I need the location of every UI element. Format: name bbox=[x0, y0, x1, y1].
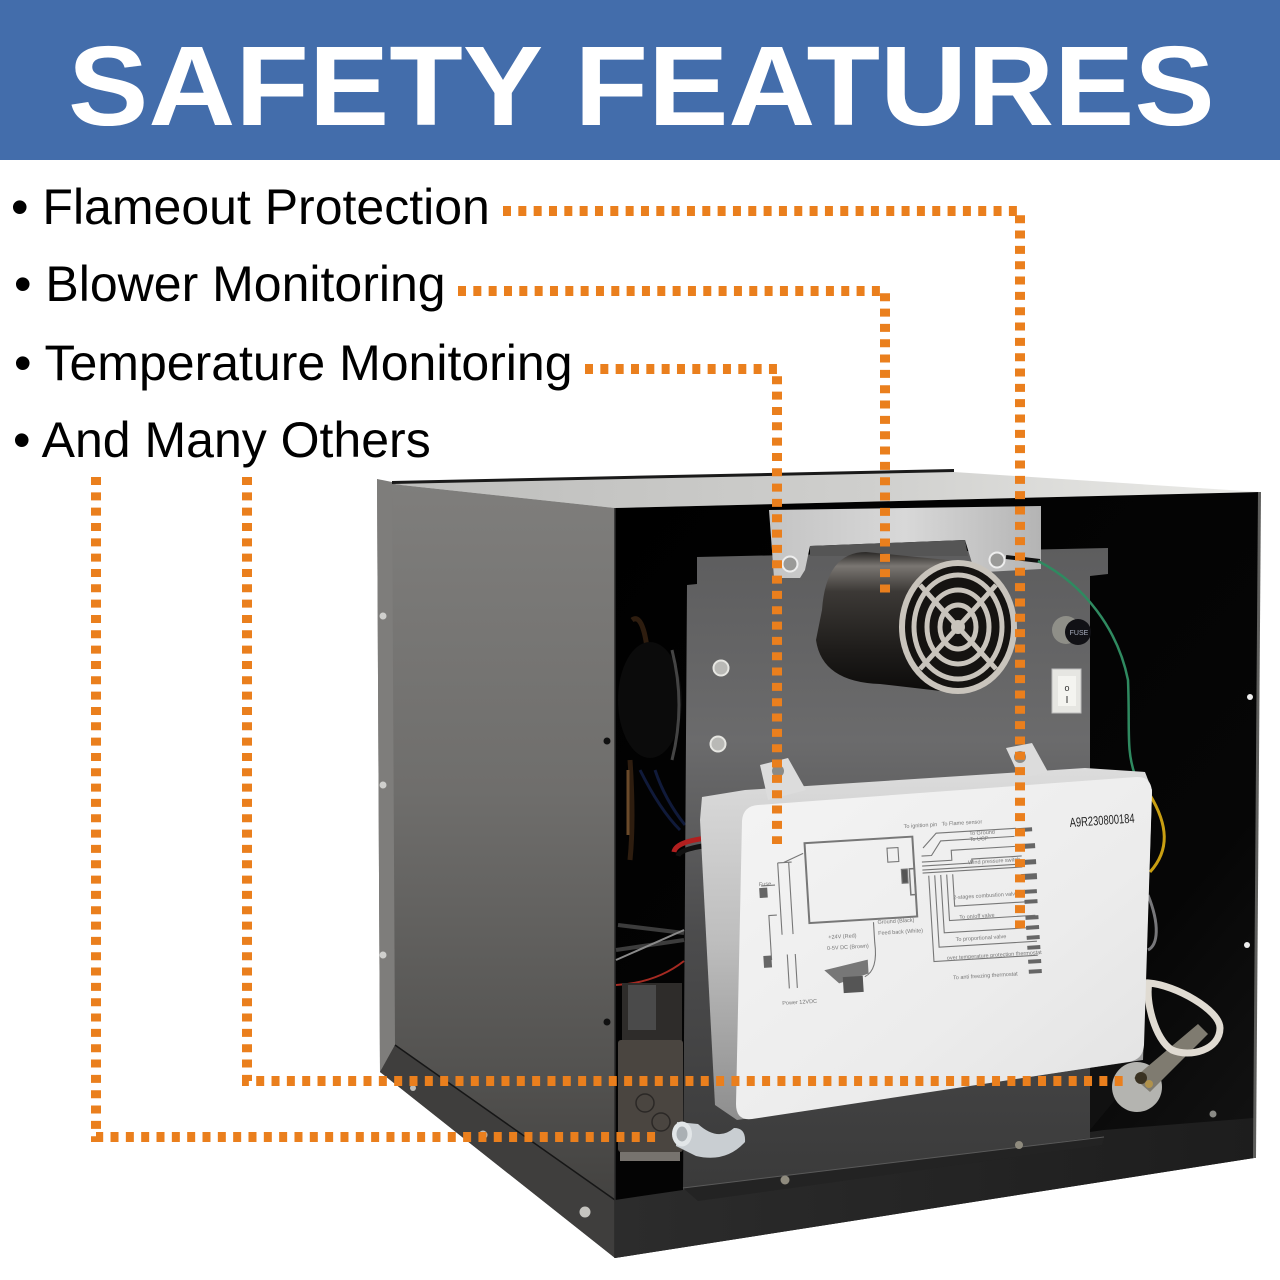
wiring diagram: Wind pressure switch bbox=[968, 857, 1020, 866]
left side panel bbox=[377, 479, 615, 1258]
leader: flameout protection bbox=[503, 211, 1020, 929]
wiring diagram: Ground (Black) bbox=[877, 918, 915, 926]
icon: blower fan bbox=[816, 552, 1017, 694]
wiring diagram: To UCP bbox=[969, 836, 989, 843]
mounting plate bbox=[683, 548, 1150, 1190]
icon: rocker switch bbox=[1052, 669, 1081, 713]
wiring diagram: To anti freezing thermostat bbox=[953, 971, 1018, 981]
unit top lid bbox=[392, 469, 1260, 508]
control box side bbox=[700, 768, 1152, 1120]
title banner: SAFETY FEATURES bbox=[68, 23, 1215, 149]
ground wire bbox=[1038, 561, 1135, 775]
thermal sensor bbox=[1112, 1024, 1208, 1112]
wiring diagram: To ignition pin bbox=[904, 822, 937, 830]
wiring diagram: +24V (Red) bbox=[828, 933, 857, 941]
yellow wire bbox=[1150, 795, 1164, 872]
wiring diagram: To proportional valve bbox=[956, 934, 1007, 943]
wiring diagram: To on/off valve bbox=[959, 913, 995, 921]
wiring diagram: 0-5V DC (Brown) bbox=[827, 943, 869, 952]
plate screws bbox=[710, 660, 728, 752]
leader: other feature tube bbox=[96, 477, 657, 1137]
white sensor wire loop bbox=[1148, 983, 1220, 1053]
icon: fuse holder bbox=[1052, 616, 1091, 645]
water drain tube bbox=[672, 1122, 745, 1158]
plate bottom flange bbox=[683, 1137, 1104, 1201]
leader: other feature sensor bbox=[247, 477, 1124, 1081]
grey wire bbox=[1148, 895, 1156, 950]
right wall edge bbox=[1210, 492, 1261, 1158]
icon: rocker switch: o bbox=[1064, 683, 1070, 693]
wiring diagram: Fuse bbox=[759, 881, 771, 888]
wiring diagram: To Flame sensor bbox=[941, 819, 983, 828]
icon: fuse holder: FUSE bbox=[1070, 630, 1089, 637]
wiring diagram: over temperature protection thermostat bbox=[947, 950, 1042, 962]
bullet: temperature monitoring: • Temperature Monitoring bbox=[14, 335, 573, 391]
mounting tabs bbox=[760, 743, 1048, 800]
bullet: blower monitoring: • Blower Monitoring bbox=[14, 256, 446, 312]
top bracket bbox=[769, 506, 1041, 578]
feature list bbox=[11, 179, 573, 468]
floor tray bbox=[615, 1118, 1254, 1258]
dotted leader lines bbox=[96, 211, 1124, 1137]
leader: blower monitoring bbox=[458, 291, 885, 593]
serial number label: A9R230800184 bbox=[1069, 810, 1135, 830]
leader: temperature monitoring bbox=[585, 369, 777, 844]
bullet: and many others: • And Many Others bbox=[13, 412, 431, 468]
bullet: flameout protection: • Flameout Protection bbox=[11, 179, 490, 235]
left interior components bbox=[616, 619, 685, 1161]
wiring diagram: 2-stages combustion valve bbox=[953, 891, 1018, 901]
control box face with wiring diagram bbox=[736, 777, 1152, 1119]
interior back bbox=[615, 492, 1260, 1258]
wiring diagram: Feed back (White) bbox=[878, 928, 923, 937]
wiring diagram bbox=[756, 816, 1045, 1008]
heater unit bbox=[377, 469, 1261, 1258]
wiring diagram: To Ground bbox=[969, 830, 995, 837]
wiring diagram: Power 12VDC bbox=[782, 999, 817, 1007]
red and black wires bbox=[674, 837, 718, 856]
